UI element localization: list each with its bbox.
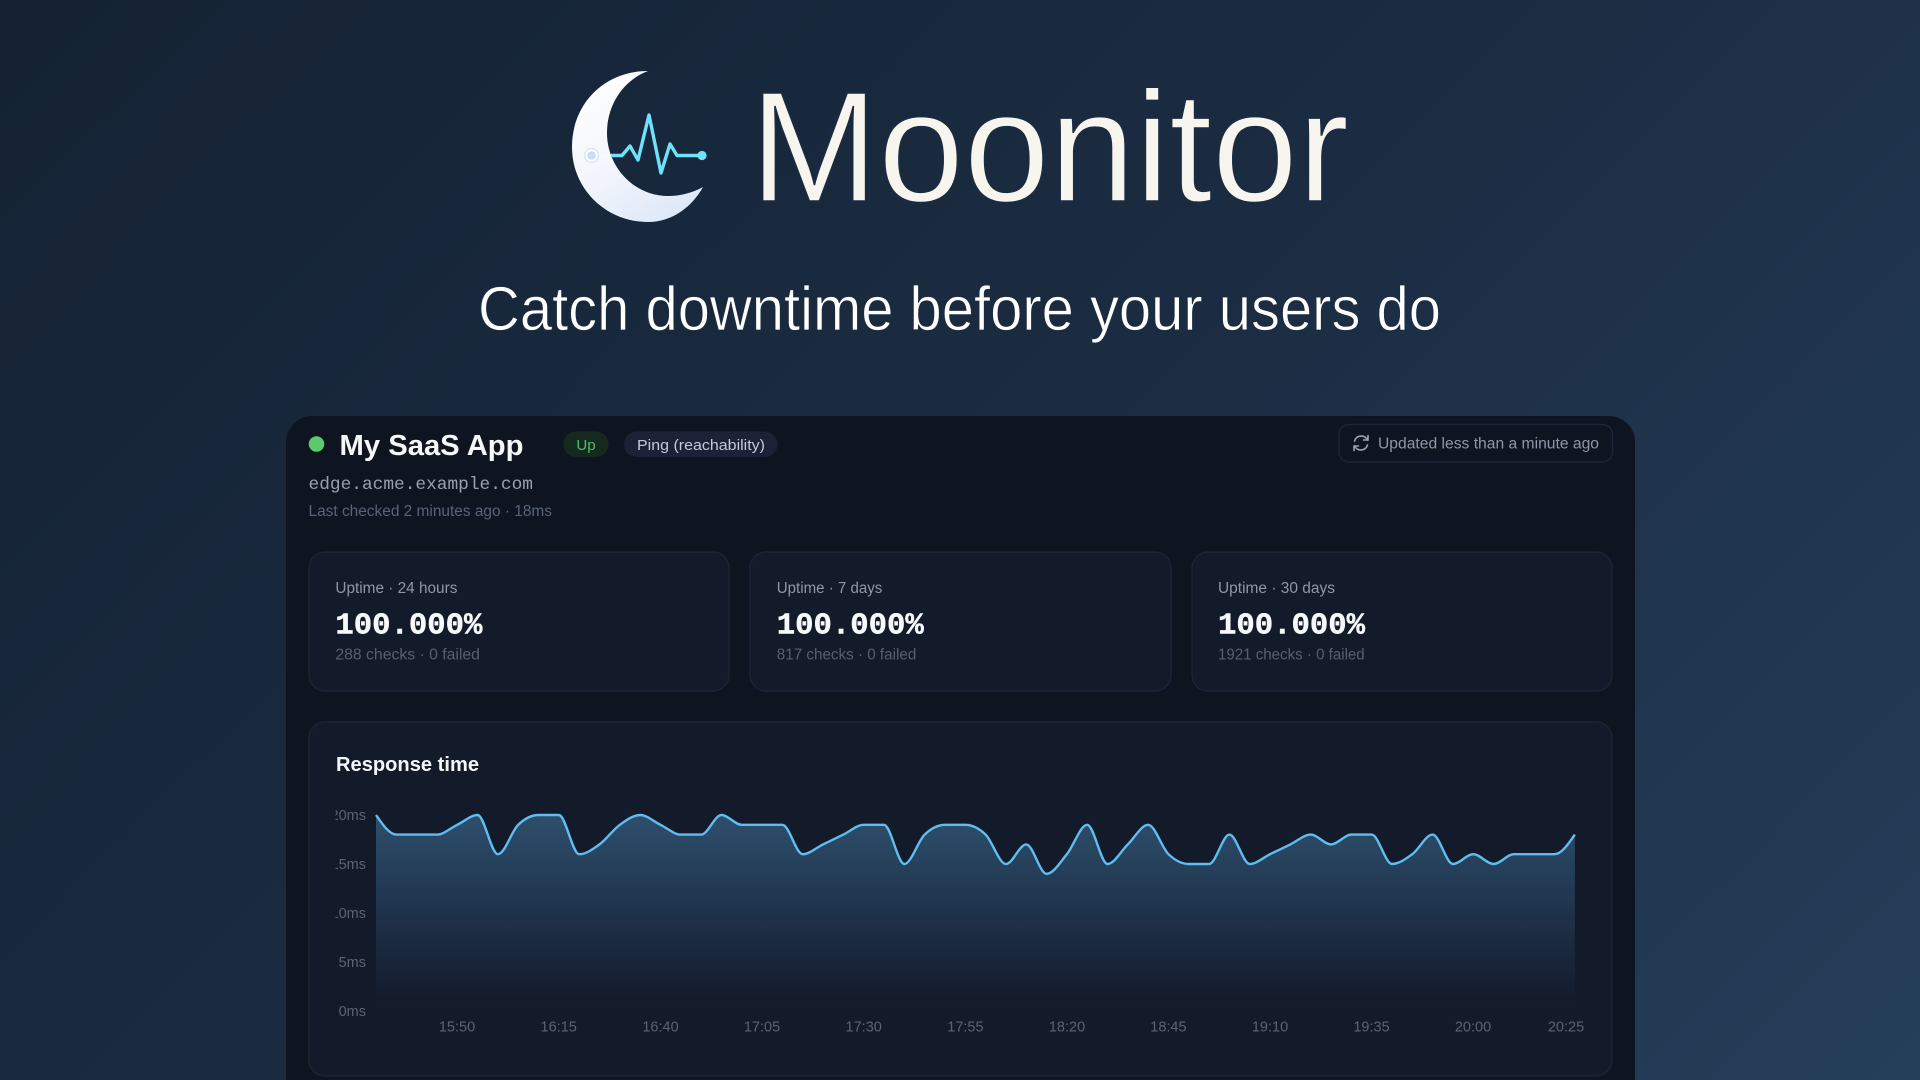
chart: x axis labels: [439, 1020, 1584, 1036]
chart: x axis labels: 19:10: [1252, 1020, 1288, 1036]
badge: check type: [624, 432, 778, 457]
chart: y axis labels: 20ms: [331, 808, 366, 824]
panel: uptime 30 days: [1192, 552, 1612, 691]
panel: uptime 30 days: 100.000%: [1218, 610, 1366, 644]
button: updated status: Updated less than a minute ago: [1378, 436, 1599, 453]
chart: x axis labels: 17:05: [744, 1020, 780, 1036]
panel: monitor dashboard: [286, 416, 1635, 1080]
chart: x axis labels: 15:50: [439, 1020, 475, 1036]
panel: uptime 24 hours: 288 checks · 0 failed: [335, 646, 480, 664]
button: updated status: [1339, 424, 1612, 462]
chart: y axis labels: [336, 810, 366, 1016]
panel: uptime 24 hours: [309, 552, 729, 691]
panel: uptime 24 hours: Uptime · 24 hours: [335, 580, 458, 597]
panel: uptime 7 days: Uptime · 7 days: [777, 580, 883, 597]
heading: response time: Response time: [336, 753, 479, 776]
title: Moonitor: [750, 60, 1349, 235]
chart: y axis labels: 0ms: [339, 1004, 366, 1020]
chart: x axis labels: 18:45: [1150, 1020, 1187, 1036]
status dot: [309, 436, 324, 452]
chart: x axis labels: 16:15: [541, 1020, 577, 1036]
panel: uptime 30 days: Uptime · 30 days: [1218, 580, 1335, 597]
text: monitor host: edge.acme.example.com: [308, 475, 533, 495]
logo: crescent moon with pulse line: [572, 71, 707, 222]
chart: x axis labels: 18:20: [1049, 1020, 1085, 1036]
chart: x axis labels: 17:55: [947, 1020, 984, 1036]
chart: y axis labels: 5ms: [339, 955, 366, 971]
subtitle: Catch downtime before your users do: [478, 275, 1441, 344]
icon: crescent moon: [572, 71, 703, 222]
chart: x axis labels: 16:40: [642, 1020, 679, 1036]
panel: uptime 7 days: 100.000%: [777, 610, 924, 644]
chart: x axis labels: 17:30: [846, 1020, 882, 1036]
panel: uptime 7 days: [750, 552, 1171, 691]
badge: check type: Ping (reachability): [637, 437, 765, 454]
icon: heartbeat pulse line: [585, 115, 707, 173]
chart: y axis labels: 15ms: [331, 857, 366, 873]
panel: uptime 30 days: 1921 checks · 0 failed: [1218, 646, 1365, 664]
icon: refresh: [1354, 436, 1368, 450]
chart: x axis labels: 19:35: [1353, 1020, 1390, 1036]
heading: monitor name: My SaaS App: [340, 430, 524, 462]
panel: uptime 24 hours: 100.000%: [335, 610, 483, 644]
chart: x axis labels: 20:00: [1455, 1020, 1491, 1036]
chart: y axis labels: 10ms: [331, 906, 366, 922]
badge: up status: Up: [576, 437, 596, 454]
badge: up status: [564, 432, 608, 457]
panel: uptime 7 days: 817 checks · 0 failed: [777, 646, 916, 664]
text: last checked: Last checked 2 minutes ago · 18ms: [308, 503, 552, 520]
chart: x axis labels: 20:25: [1548, 1020, 1584, 1036]
chart: response time area and line: [376, 815, 1575, 1011]
panel: response time chart: [309, 722, 1612, 1076]
